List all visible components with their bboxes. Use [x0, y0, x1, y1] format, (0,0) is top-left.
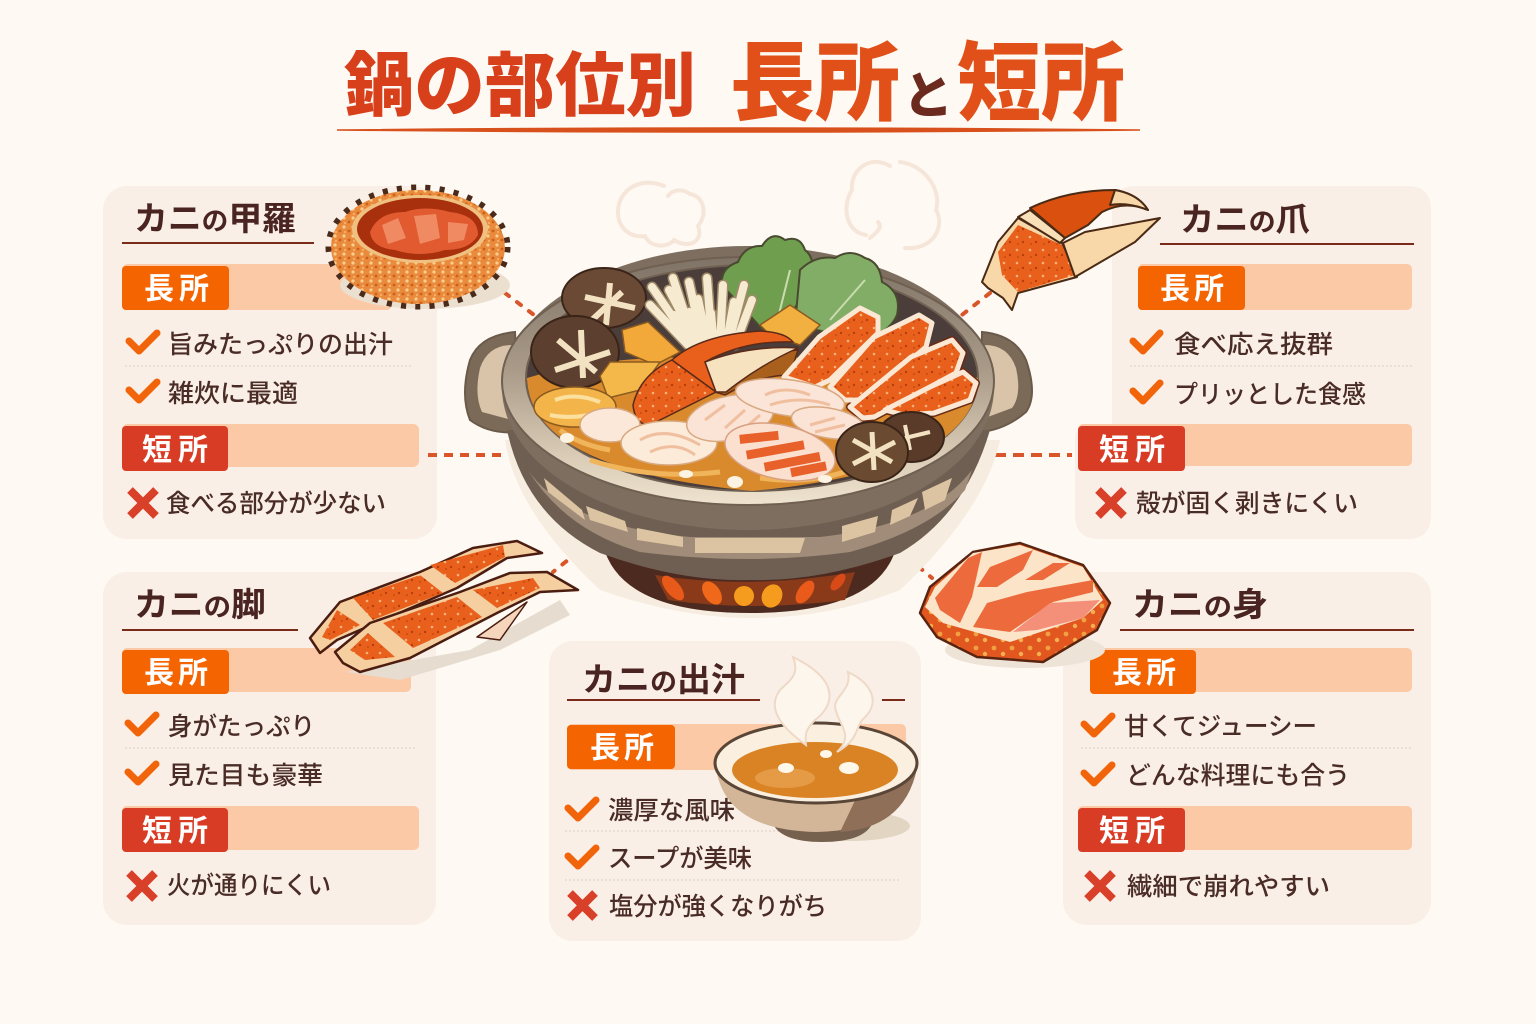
mushrooms front: [836, 412, 944, 482]
merit item 1: 甘くてジューシー: [1124, 713, 1317, 741]
demerit item: 繊細で崩れやすい: [1127, 873, 1330, 901]
title: 短所: [957, 36, 1125, 132]
mushrooms back: [531, 268, 646, 388]
badge: merit: 長所: [590, 732, 654, 765]
left handle: [465, 332, 520, 432]
badge: merit: [1090, 650, 1196, 694]
demerit item: 塩分が強くなりがち: [609, 893, 827, 921]
steam clouds: [618, 162, 939, 248]
squash pieces: [534, 305, 820, 427]
merit item 1: 旨みたっぷりの出汁: [168, 331, 393, 359]
badge: demerit: 短所: [142, 434, 208, 467]
merit item 2: 雑炊に最適: [168, 380, 298, 408]
badge: merit: 長所: [1112, 657, 1176, 690]
title: 鍋の部位別: [344, 47, 696, 125]
title: 長所: [730, 36, 900, 132]
badge: merit: [122, 650, 229, 694]
fish pieces: [580, 373, 867, 465]
demerit item: 食べる部分が少ない: [166, 490, 386, 518]
panel: kani no ashi: [103, 572, 436, 925]
crab leg strips: [784, 308, 976, 418]
icon: crab claw: [982, 190, 1160, 310]
badge: demerit: [1078, 808, 1185, 852]
badge: demerit: [122, 426, 228, 471]
burner base: [603, 545, 897, 613]
heading: mi: カニの身: [1132, 586, 1268, 623]
merit item 2: 見た目も豪華: [168, 762, 323, 790]
title: [337, 36, 1140, 132]
pot bricks: [544, 478, 952, 553]
right handle: [980, 332, 1032, 432]
demerit item: 殻が固く剥きにくい: [1136, 490, 1358, 518]
legs shadow: [345, 600, 570, 680]
heading: dashi: カニの出汁: [582, 661, 745, 698]
icon: soup bowl: [715, 657, 917, 842]
demerit item: 火が通りにくい: [167, 872, 331, 900]
crab legs in pot: [850, 340, 976, 418]
badge: demerit: [1078, 426, 1185, 471]
icon: crab shell: [331, 190, 510, 309]
badge: demerit: 短所: [142, 815, 208, 848]
panel: kani no tsume: [1075, 186, 1431, 539]
badge: merit: 長所: [144, 657, 208, 690]
greens: [722, 236, 898, 340]
pot body: [507, 430, 990, 580]
merit item 2: プリッとした食感: [1174, 381, 1366, 409]
badge: merit: [122, 266, 229, 310]
badge: merit: 長所: [144, 273, 209, 306]
pot shadow: [505, 440, 1000, 618]
title: と: [903, 68, 953, 124]
badge: merit: [567, 725, 675, 769]
crab meat slice: [720, 414, 840, 490]
panel: kani no koura: [103, 186, 437, 539]
claw in pot: [633, 331, 798, 425]
panel: kani no dashi: [549, 641, 921, 941]
connector dots: [428, 293, 1072, 578]
badge: demerit: 短所: [1099, 434, 1165, 467]
merit item 1: 食べ応え抜群: [1174, 331, 1333, 359]
merit item 1: 身がたっぷり: [168, 713, 315, 741]
merit item 2: スープが美味: [608, 845, 752, 873]
badge: merit: 長所: [1160, 273, 1224, 306]
badge: demerit: [122, 808, 228, 852]
merit item 1: 濃厚な風味: [608, 797, 735, 825]
badge: merit: [1138, 266, 1245, 310]
merit item 2: どんな料理にも合う: [1126, 762, 1350, 790]
icon: crab legs: [310, 541, 578, 680]
heading: ashi: カニの脚: [134, 586, 266, 623]
bowl steam: [775, 657, 873, 752]
soup highlights: [560, 433, 832, 488]
flames: [658, 571, 848, 611]
heading: tsume: カニの爪: [1180, 201, 1310, 238]
badge: demerit: 短所: [1099, 815, 1165, 848]
enoki: [650, 278, 752, 345]
panel: kani no mi: [1063, 572, 1431, 925]
pot rim: [502, 246, 994, 530]
heading: koura: カニの甲羅: [134, 200, 296, 237]
icon: crab meat: [920, 543, 1110, 668]
central hot pot: [465, 236, 1032, 618]
